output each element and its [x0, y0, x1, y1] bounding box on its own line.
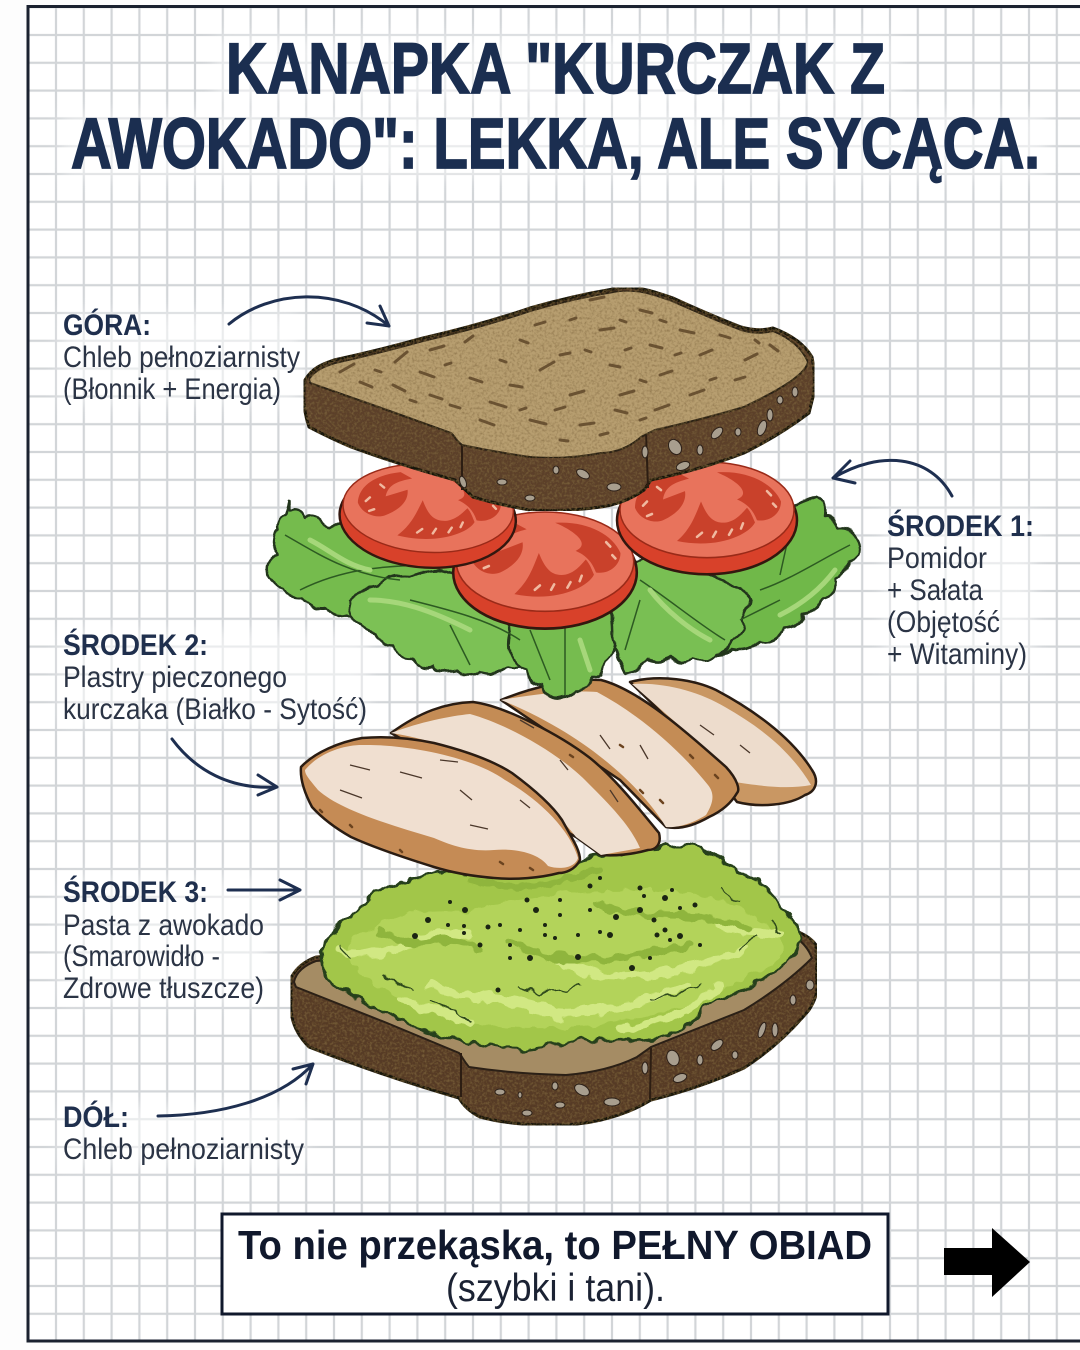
label: middle 3: Zdrowe tłuszcze) [63, 972, 264, 1005]
arrow: top bread [229, 297, 389, 326]
label: middle 2: kurczaka (Białko - Sytość) [63, 693, 367, 726]
callout box [222, 1214, 888, 1314]
title: KANAPKA "KURCZAK Z [226, 30, 885, 109]
callout box: To nie przekąska, to PEŁNY OBIAD [238, 1222, 872, 1268]
arrow: middle 1 [833, 460, 952, 496]
illustration: top bread slice [304, 288, 814, 511]
label: middle 3: Pasta z awokado [63, 909, 264, 942]
label: middle 3 [63, 875, 264, 1005]
label: middle 3: ŚRODEK 3: [63, 875, 208, 909]
arrow: next [944, 1228, 1030, 1297]
label: middle 1: ŚRODEK 1: [887, 509, 1034, 543]
label: top bread: GÓRA: [63, 308, 151, 342]
illustration: chicken slices [301, 678, 816, 879]
label: middle 1: (Objętość [887, 606, 1000, 639]
label: middle 3: (Smarowidło - [63, 940, 220, 973]
label: middle 1: + Sałata [887, 574, 983, 607]
arrow: middle 3 [228, 880, 300, 900]
arrow: bottom bread [158, 1064, 313, 1116]
label: middle 2 [63, 628, 367, 726]
illustration: avocado spread [321, 845, 800, 1049]
label: top bread: Chleb pełnoziarnisty [63, 341, 300, 374]
illustration: lettuce [268, 496, 860, 698]
label: middle 1: Pomidor [887, 542, 987, 575]
title [71, 30, 1040, 184]
label: top bread [63, 308, 300, 406]
arrow: middle 2 [172, 739, 277, 795]
label: bottom bread: Chleb pełnoziarnisty [63, 1133, 304, 1166]
illustration: bottom bread slice [291, 925, 817, 1125]
label: bottom bread [63, 1100, 304, 1166]
label: top bread: (Błonnik + Energia) [63, 373, 281, 406]
label: bottom bread: DÓŁ: [63, 1100, 129, 1134]
label: middle 1 [887, 509, 1034, 671]
callout box: (szybki i tani). [446, 1267, 665, 1310]
label: middle 2: ŚRODEK 2: [63, 628, 208, 662]
label: middle 2: Plastry pieczonego [63, 661, 287, 694]
label: middle 1: + Witaminy) [887, 638, 1027, 671]
illustration: tomato slices [337, 459, 797, 629]
